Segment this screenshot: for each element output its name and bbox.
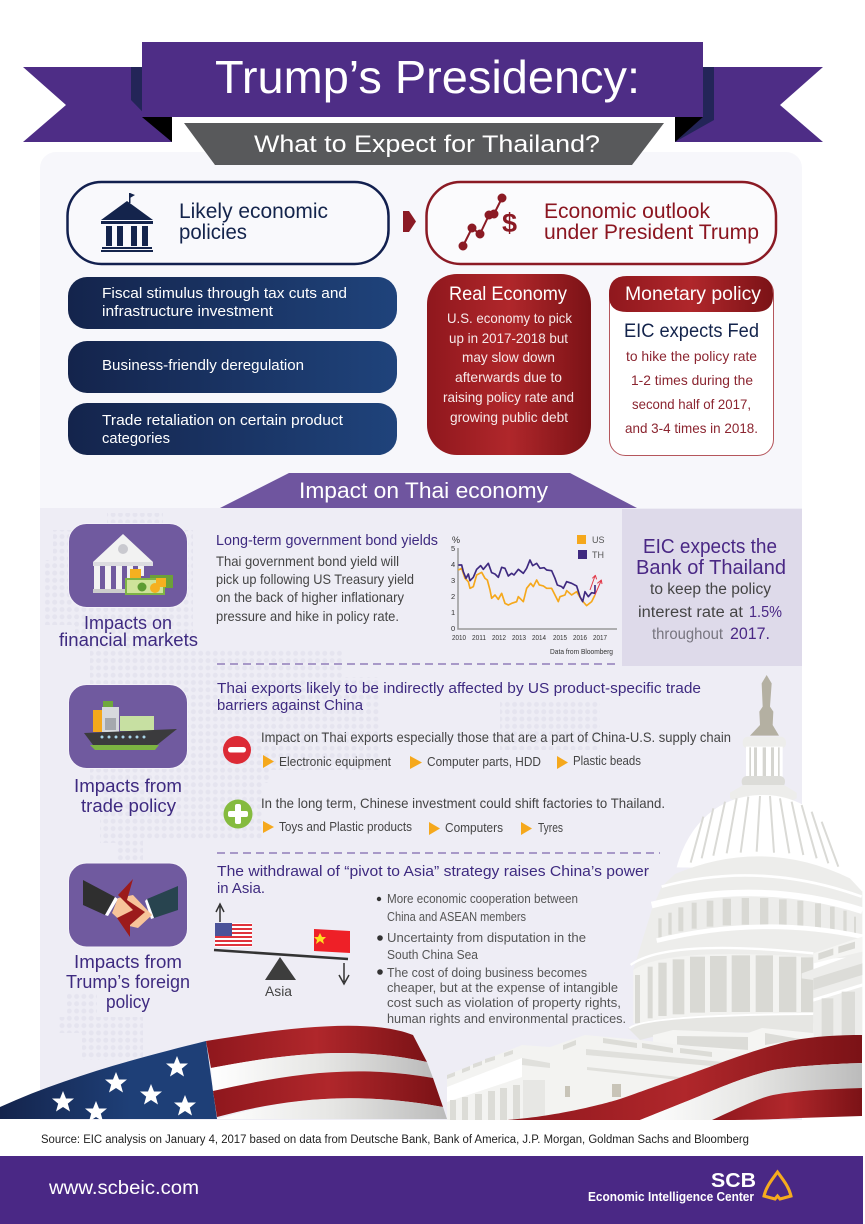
panel: real economy: Real Economy (449, 284, 567, 305)
line chart: bond yields: 2015 (553, 633, 567, 642)
icon: rising chart with dollar: $ (502, 208, 517, 238)
icon: rising chart with dollar (459, 194, 517, 250)
lower panel background (40, 508, 802, 1120)
bullet list: China's power: Uncertainty from disputation in the (387, 931, 586, 945)
line chart: bond yields: 2013 (512, 633, 526, 642)
panel: monetary policy (609, 276, 774, 456)
text block: negative export impact: Computer parts, HDD (427, 754, 541, 769)
panel: monetary policy: Monetary policy (625, 284, 762, 305)
subtitle banner: What to Expect for Thailand? (254, 131, 600, 158)
panel: real economy: U.S. economy to pick (447, 310, 573, 326)
text block: long-term government bond yields: pick up following US Treasury yield (216, 571, 414, 587)
capitol building illustration (447, 675, 862, 1120)
line chart: bond yields: 2010 (452, 633, 466, 642)
line chart: bond yields: 4 (451, 560, 455, 569)
policy bar: trade retaliation: Trade retaliation on certain product (102, 413, 343, 429)
text block: trade heading: barriers against China (217, 698, 364, 714)
footer: Economic Intelligence Center (588, 1190, 754, 1204)
bullet list: China's power: cost such as violation of property rights, (387, 996, 621, 1010)
line chart: bond yields: 1 (451, 608, 455, 617)
icon: government building (101, 193, 153, 252)
label: impacts on financial markets: Impacts on (84, 613, 172, 633)
title: Trump’s Presidency: (215, 51, 640, 103)
text block: negative export impact: Electronic equipment (279, 754, 391, 769)
section heading: impact on Thai economy: Impact on Thai economy (299, 478, 548, 503)
text block: negative export impact: Plastic beads (573, 753, 641, 768)
panel: real economy (427, 274, 591, 455)
panel: economic outlook header: Economic outlook (544, 200, 710, 223)
text block: long-term government bond yields: Long-term government bond yields (216, 533, 438, 549)
text block: positive long-term shift: Computers (445, 820, 503, 835)
text block: negative export impact (261, 729, 731, 769)
policy bar: trade retaliation: categories (102, 431, 170, 447)
label: impacts from trade policy: Impacts from (74, 776, 182, 796)
label: impacts from Trump's foreign policy: policy (106, 992, 150, 1012)
callout: Bank of Thailand expectation: interest rate at (638, 604, 744, 621)
callout: Bank of Thailand expectation: Bank of Thailand (636, 557, 786, 579)
panel: likely economic policies header (68, 182, 388, 264)
panel: monetary policy: 1-2 times during the (631, 372, 753, 388)
policy bar: fiscal stimulus (68, 277, 397, 329)
line chart: bond yields: 2011 (472, 633, 486, 642)
China flag (314, 929, 350, 953)
callout: Bank of Thailand expectation: throughout (652, 626, 724, 643)
callout: Bank of Thailand expectation: to keep the policy (650, 581, 771, 598)
text block: pivot to Asia heading: The withdrawal of “pivot to Asia” strategy raises China’s power (217, 864, 649, 880)
footer (0, 1156, 863, 1224)
panel: real economy: may slow down (462, 349, 555, 365)
line chart: bond yields: 2 (451, 592, 455, 601)
line chart: bond yields: 0 (451, 624, 455, 633)
text block: pivot to Asia heading (217, 864, 649, 897)
panel: real economy: growing public debt (450, 409, 568, 425)
callout: Bank of Thailand expectation (622, 509, 802, 666)
bullet list: China's power: human rights and environmental practices. (387, 1012, 626, 1026)
policy bar: deregulation: Business-friendly deregulation (102, 358, 304, 374)
label: impacts from trade policy: trade policy (81, 796, 176, 816)
line chart: bond yields: 2012 (492, 633, 506, 642)
panel: monetary policy: to hike the policy rate (626, 348, 757, 364)
panel: economic outlook header (426, 182, 776, 264)
line chart: bond yields: 3 (451, 576, 455, 585)
line chart: bond yields (451, 535, 617, 656)
line chart: bond yields: 2014 (532, 633, 546, 642)
bullet list: China's power: More economic cooperation between (387, 892, 578, 906)
divider (217, 852, 660, 854)
text block: pivot to Asia heading: in Asia. (217, 881, 265, 897)
bullet list: China's power: The cost of doing business becomes (387, 966, 587, 980)
label: impacts from Trump's foreign policy (66, 952, 190, 1012)
icon: plus (224, 800, 252, 828)
lower wings (447, 1028, 813, 1120)
line chart: bond yields: % (452, 535, 460, 545)
seesaw diagram: US and China: Asia (265, 983, 292, 999)
icon: minus (223, 736, 251, 764)
text block: positive long-term shift: In the long term, Chinese investment could shift factories to Thailand. (261, 795, 665, 811)
panel: real economy: raising policy rate and (443, 389, 574, 405)
line chart: bond yields: 2016 (573, 633, 587, 642)
bullet list: China's power: China and ASEAN members (387, 910, 526, 924)
policy bar: fiscal stimulus: infrastructure investment (102, 304, 273, 320)
divider (217, 663, 618, 665)
white strip under ribbon (0, 1120, 865, 1156)
label: impacts from Trump's foreign policy: Impacts from (74, 952, 182, 972)
flag ribbon: left (0, 1026, 447, 1122)
label: impacts from Trump's foreign policy: Trump’s foreign (66, 972, 190, 992)
policy bar: fiscal stimulus: Fiscal stimulus through tax cuts and (102, 286, 347, 302)
panel: likely economic policies header: policies (179, 221, 247, 244)
subtitle banner (184, 123, 664, 165)
flag ribbon: right (507, 1035, 862, 1120)
text block: long-term government bond yields: pressure and hike in policy rate. (216, 608, 399, 624)
label: impacts on financial markets (59, 613, 198, 650)
line chart: bond yields: Data from Bloomberg (550, 647, 613, 656)
text block: long-term government bond yields (216, 533, 438, 624)
callout: Bank of Thailand expectation: 2017. (730, 625, 770, 643)
callout: Bank of Thailand expectation: 1.5% (749, 604, 782, 621)
icon: cargo ship (68, 684, 188, 768)
label: impacts from trade policy (74, 776, 182, 816)
bullet list: China's power (377, 892, 626, 1026)
icon: financial markets bank with money (68, 524, 188, 608)
text block: positive long-term shift: Tyres (538, 820, 563, 835)
dotted world map background (45, 513, 600, 1060)
icon: broken handshake (68, 863, 188, 947)
panel: economic outlook header: under President Trump (544, 221, 759, 244)
panel: monetary policy: second half of 2017, (632, 396, 751, 412)
line chart: bond yields: 2017 (593, 633, 607, 642)
panel: monetary policy: EIC expects Fed (624, 321, 759, 342)
panel: real economy: afterwards due to (455, 369, 562, 385)
upper panel background (40, 152, 802, 552)
text block: trade heading (217, 681, 701, 714)
text block: long-term government bond yields: on the back of higher inflationary (216, 589, 404, 605)
text block: negative export impact: Impact on Thai exports especially those that are a part of China-U.S. supply chain (261, 729, 731, 745)
policy bar: deregulation (68, 341, 397, 393)
US flag (215, 923, 252, 947)
icon: SCB logo (764, 1172, 791, 1199)
panel: likely economic policies header: Likely economic (179, 200, 328, 223)
text block: trade heading: Thai exports likely to be indirectly affected by US product-specific trade (217, 681, 701, 697)
section heading: impact on Thai economy (220, 473, 637, 508)
label: impacts on financial markets: financial markets (59, 630, 198, 650)
callout: Bank of Thailand expectation: EIC expects the (643, 536, 777, 558)
bullet list: China's power: South China Sea (387, 948, 478, 962)
bullet list: China's power: cheaper, but at the expense of intangible (387, 981, 618, 995)
text block: positive long-term shift: Toys and Plastic products (279, 819, 412, 834)
text block: long-term government bond yields: Thai government bond yield will (216, 553, 399, 569)
policy bar: trade retaliation (68, 403, 397, 455)
footer: www.scbeic.com (48, 1178, 199, 1199)
text block: positive long-term shift (261, 795, 665, 835)
seesaw diagram: US and China (214, 904, 350, 999)
arrow between headers (403, 211, 416, 232)
line chart: bond yields: 5 (451, 544, 455, 553)
chart legend (577, 535, 605, 560)
title ribbon (23, 42, 823, 142)
footer: SCB (711, 1170, 756, 1192)
chart legend: TH (592, 550, 604, 560)
chart legend: US (592, 535, 605, 545)
panel: monetary policy: and 3-4 times in 2018. (625, 420, 758, 436)
source note: Source: EIC analysis on January 4, 2017 based on data from Deutsche Bank, Bank of America, J.P. Morgan, Goldman Sachs and Bloomberg (41, 1134, 749, 1146)
panel: real economy: up in 2017-2018 but (449, 330, 568, 346)
